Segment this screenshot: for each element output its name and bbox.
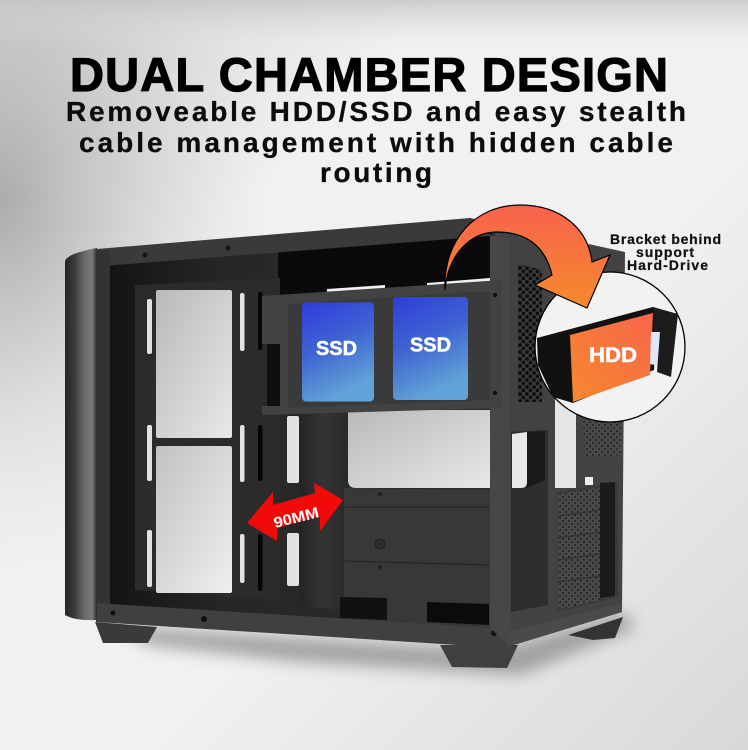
bottom rail — [96, 603, 507, 648]
SSD left — [302, 302, 374, 402]
bracket caption: support — [636, 244, 694, 260]
bottom screws — [110, 610, 497, 636]
upper dark compartment — [278, 228, 492, 300]
black slots — [258, 292, 262, 591]
SSD right: SSD — [410, 334, 451, 356]
90MM red double arrow — [247, 483, 343, 541]
bracket caption — [610, 231, 721, 273]
HDD label: HDD — [589, 344, 637, 367]
front right pillar — [490, 235, 510, 646]
drive bracket — [262, 278, 502, 415]
center see-through window — [348, 410, 490, 488]
rear see-through gap — [555, 392, 576, 488]
subtitle — [66, 96, 686, 188]
main motherboard plate — [135, 278, 492, 632]
rear upper mesh — [583, 420, 622, 456]
floor shadow — [120, 612, 635, 675]
curved orange arrow — [445, 205, 610, 308]
HDD callout circle — [535, 272, 685, 422]
bracket caption: Bracket behind — [610, 231, 721, 247]
left front pillar — [65, 248, 97, 620]
top rail screws — [104, 246, 230, 260]
title: DUAL CHAMBER DESIGN — [70, 48, 668, 101]
left window upper — [156, 290, 232, 438]
top rail — [97, 218, 490, 266]
subtitle: cable management with hidden cable — [79, 127, 673, 158]
PC case — [65, 218, 625, 668]
bottom grills — [340, 597, 489, 625]
right side panel — [470, 218, 625, 647]
left window lower — [156, 446, 232, 593]
bracket caption: Hard-Drive — [627, 257, 708, 273]
side mesh — [518, 264, 542, 402]
SSD left: SSD — [316, 338, 357, 360]
inner chamber — [105, 232, 495, 632]
case feet — [95, 617, 623, 668]
side opening — [511, 429, 548, 612]
SSD right — [393, 297, 468, 400]
rear expansion slots — [557, 477, 618, 612]
90MM red double arrow: 90MM — [272, 504, 321, 532]
HDD body — [570, 313, 653, 402]
subtitle: Removeable HDD/SSD and easy stealth — [66, 96, 686, 127]
hard drive bracket — [537, 307, 657, 403]
side bottom rail — [507, 603, 622, 647]
white highlight strips — [327, 278, 490, 292]
right side frame — [510, 238, 547, 432]
left frame post — [97, 250, 110, 606]
cutout slots — [147, 293, 299, 587]
bracket end piece — [650, 307, 678, 377]
subtitle: routing — [320, 157, 432, 188]
